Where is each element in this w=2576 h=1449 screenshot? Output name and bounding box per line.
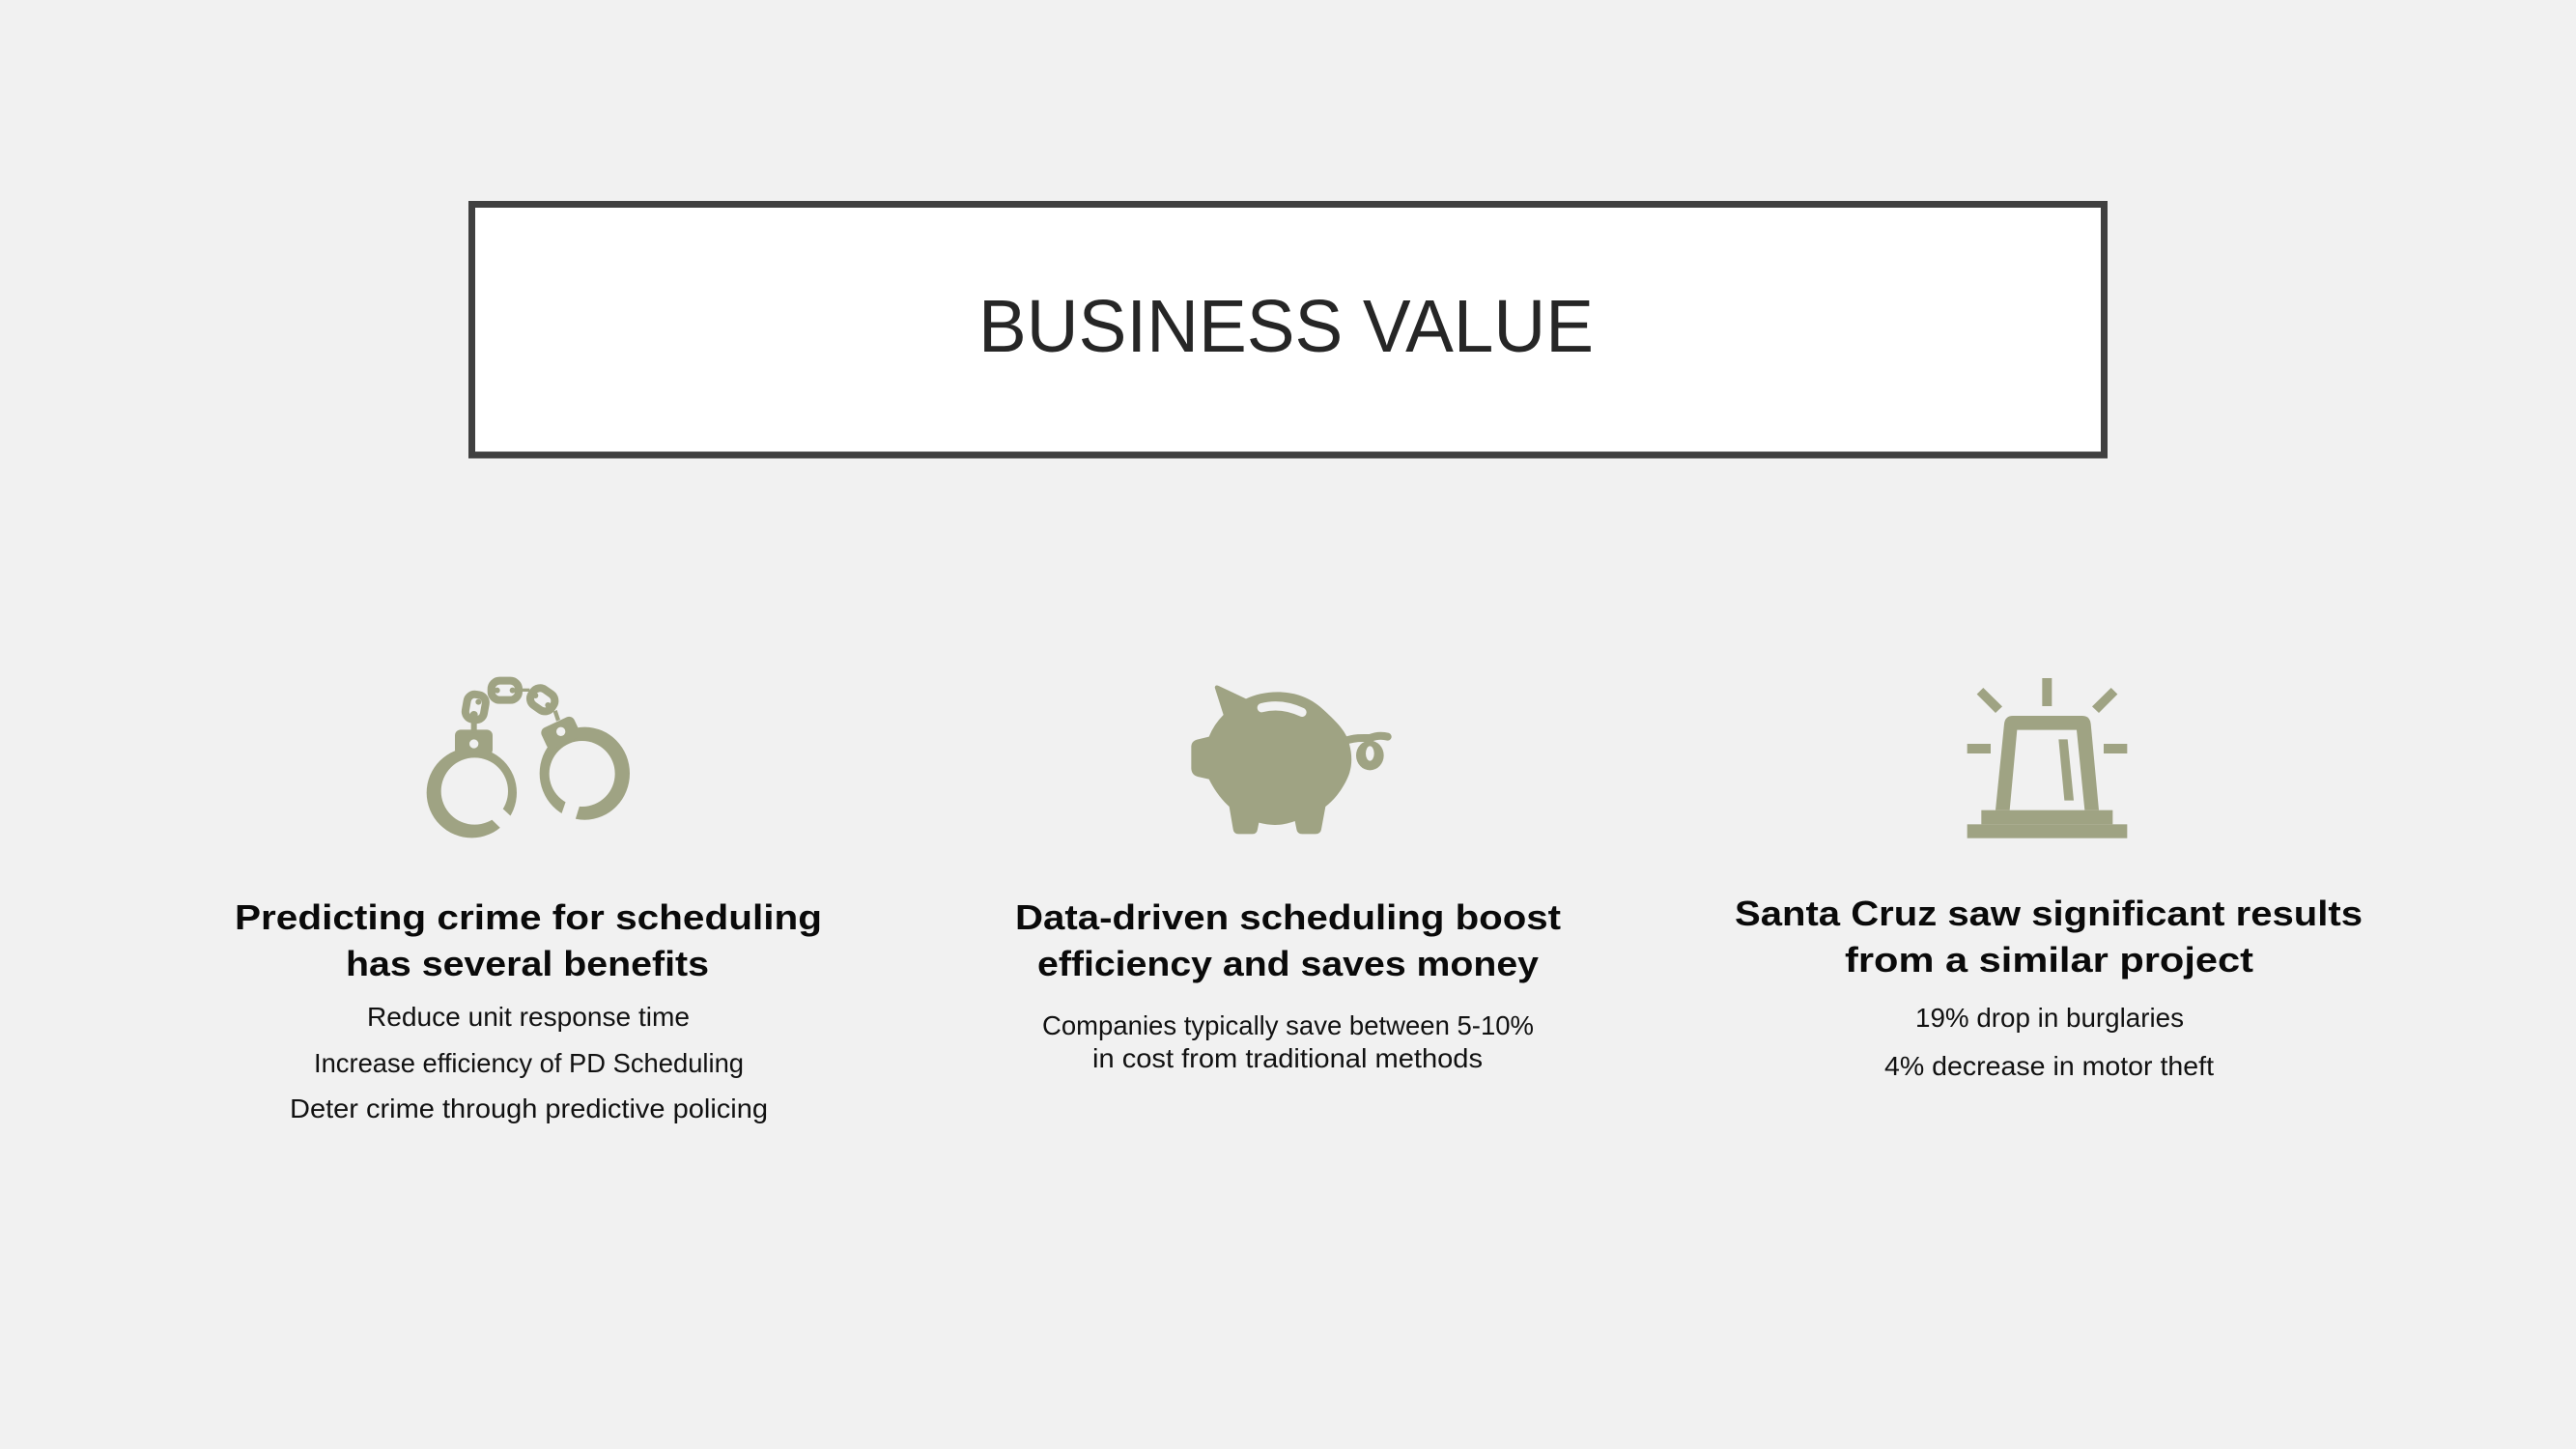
heading: predicting crime bbox=[235, 897, 822, 983]
text: santa cruz results: 4% decrease in motor theft bbox=[1884, 1051, 2214, 1081]
title: BUSINESS VALUE bbox=[978, 285, 1594, 368]
panel: santa cruz bbox=[1735, 678, 2363, 1081]
text: savings detail: Companies typically save between 5-10% bbox=[1042, 1010, 1534, 1040]
text: santa cruz results: 19% drop in burglaries bbox=[1915, 1003, 2184, 1033]
heading: predicting crime: has several benefits bbox=[346, 944, 709, 983]
panel: predicting crime bbox=[235, 681, 822, 1123]
heading: santa cruz: Santa Cruz saw significant results bbox=[1735, 894, 2363, 933]
text: savings detail bbox=[1042, 1010, 1534, 1073]
text: savings detail: in cost from traditional methods bbox=[1092, 1043, 1483, 1073]
heading: santa cruz bbox=[1735, 894, 2363, 980]
icon: handcuffs bbox=[427, 681, 630, 838]
icon: piggy bank bbox=[1191, 685, 1388, 834]
heading: data-driven scheduling: efficiency and saves money bbox=[1037, 944, 1539, 983]
text: benefits list: Reduce unit response time bbox=[367, 1002, 690, 1032]
heading: santa cruz: from a similar project bbox=[1845, 940, 2253, 980]
heading: data-driven scheduling bbox=[1015, 897, 1561, 983]
text: benefits list: Increase efficiency of PD Scheduling bbox=[314, 1048, 744, 1078]
heading: predicting crime: Predicting crime for scheduling bbox=[235, 897, 822, 937]
text: benefits list: Deter crime through predictive policing bbox=[290, 1094, 768, 1123]
heading: data-driven scheduling: Data-driven scheduling boost bbox=[1015, 897, 1561, 937]
text: benefits list bbox=[290, 1002, 768, 1123]
panel: data-driven scheduling bbox=[1015, 685, 1561, 1073]
title box bbox=[471, 205, 2104, 455]
icon: police siren bbox=[1967, 678, 2127, 838]
text: santa cruz results bbox=[1884, 1003, 2214, 1081]
